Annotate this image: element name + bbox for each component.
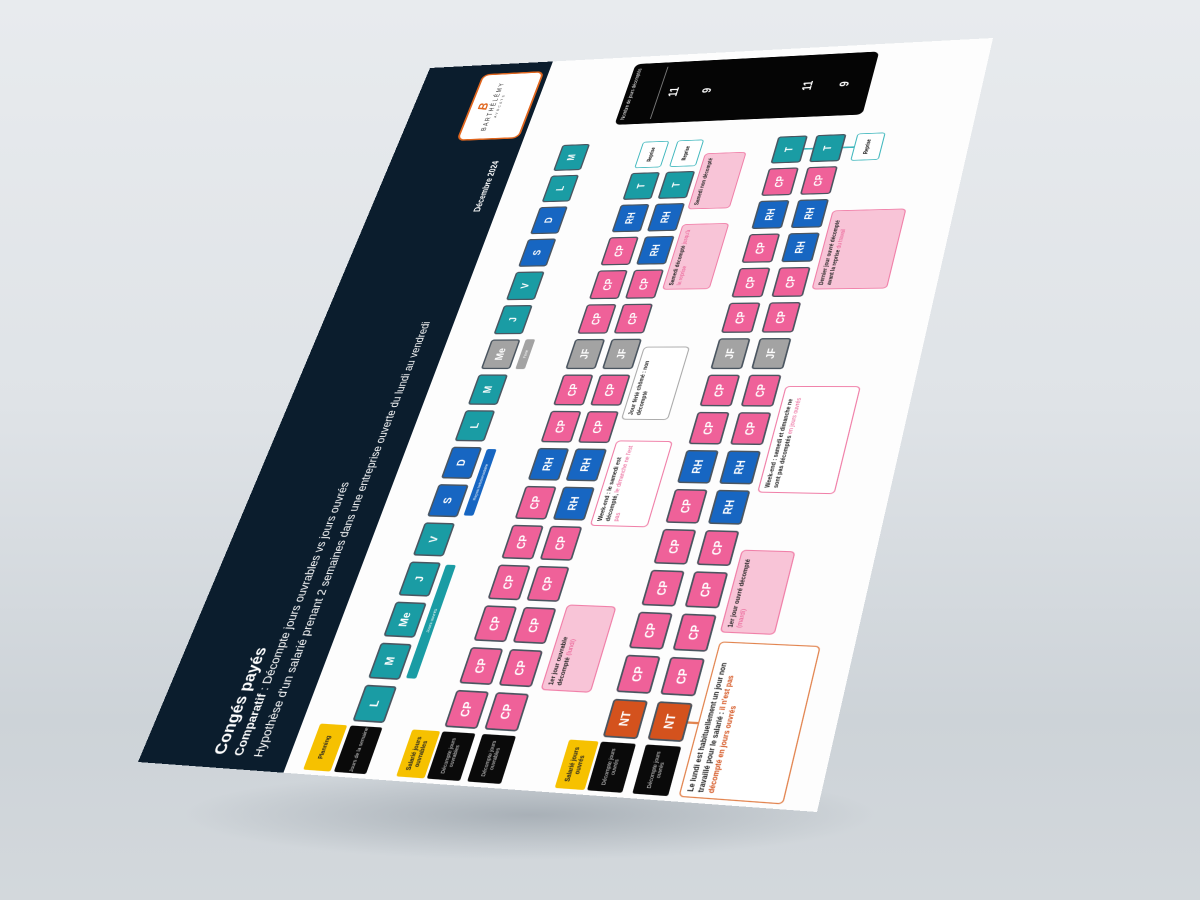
- row label C: [467, 734, 516, 784]
- callout: lundi non travaillé: [678, 641, 821, 805]
- row: planning days: V: [427, 536, 441, 543]
- row B: CP: [612, 245, 627, 257]
- callout: 1er jour ouvré: 1er jour ouvré décompté (mardi): [727, 559, 753, 628]
- row C: T: [670, 182, 683, 187]
- row E: CP: [783, 276, 799, 288]
- group label: ouvrables: Salarié jours ouvrables: [405, 737, 430, 771]
- row: planning days: S: [531, 250, 544, 255]
- row C: JF: [614, 349, 630, 359]
- row: planning days: Me: [396, 612, 414, 627]
- row B: CP: [514, 535, 531, 549]
- row D: CP: [666, 539, 684, 554]
- row E: CP: [709, 541, 727, 555]
- callout: samedi: Samedi décompté jusqu'à la reprise: [669, 230, 692, 285]
- row D: CP: [772, 176, 788, 187]
- tag: férié: Férié: [521, 350, 529, 358]
- callout: dimanche: [687, 152, 747, 209]
- row B: [444, 140, 669, 729]
- row: planning days: J: [413, 576, 427, 582]
- tag: repos hebdo: Repos hebdomadaire: [471, 464, 489, 500]
- callout: premier jour: 1er jour ouvrable décompté (lundi): [548, 637, 578, 686]
- row label C: Décompte jours ouvrables: [480, 741, 501, 777]
- row E: CP: [698, 582, 715, 597]
- tag: jours ouvrés: Jours ouvrés: [424, 609, 438, 633]
- row D: CP: [654, 581, 672, 596]
- row B: Reprise: [646, 147, 657, 162]
- row C: RH: [648, 244, 663, 256]
- row: planning days: M: [565, 154, 578, 161]
- row: planning days: L: [468, 423, 482, 429]
- row D: T: [783, 147, 796, 152]
- header band: [138, 61, 553, 773]
- row D: CP: [642, 623, 660, 638]
- total row E: 9: [836, 81, 853, 87]
- row E: JF: [764, 348, 779, 359]
- row label E: Décompte jours ouvrés: [645, 751, 665, 789]
- total row D: 11: [799, 80, 816, 91]
- row B: CP: [601, 279, 616, 291]
- row: planning days: V: [519, 283, 532, 289]
- callout: jour férié: Jour férié chômé : non décompté: [628, 361, 652, 415]
- row D: CP: [712, 384, 728, 397]
- row D: NT: [616, 711, 634, 727]
- row label B: Décompte jours ouvrables: [439, 738, 461, 774]
- row label: planning: Jours de la semaine: [347, 727, 369, 772]
- row B: JF: [578, 349, 593, 359]
- row C: CP: [637, 278, 652, 290]
- callout: lundi non travaillé: Le lundi est habituellement un jour non travaillé pour le salarié : il n'est pas décompté en jours ouvrés: [688, 663, 739, 794]
- row B: CP: [487, 616, 504, 631]
- row D: CP: [733, 311, 749, 324]
- tag: repos hebdo: [463, 449, 497, 516]
- row D: CP: [629, 666, 647, 682]
- row: planning days: Me: [493, 348, 509, 360]
- logo: BARTHÉLÉMY: [481, 82, 506, 131]
- reprise group 2: Reprise: [863, 139, 873, 154]
- row E: RH: [793, 241, 808, 254]
- row C: CP: [553, 536, 570, 550]
- connector: T to reprise: [843, 146, 854, 148]
- callout: samedi: [662, 223, 729, 290]
- callout: week-end ouvrés: [757, 386, 861, 494]
- logo: AVOCATS: [492, 94, 506, 118]
- group label: planning: [303, 724, 347, 772]
- connector: T to T: [804, 148, 813, 150]
- total row C: 9: [699, 88, 715, 93]
- row: planning days: M: [382, 656, 398, 666]
- row label D: Décompte jours ouvrés: [600, 748, 620, 785]
- paper sheet: [138, 38, 993, 812]
- paper shadow: [180, 770, 880, 860]
- row: planning days: M: [481, 386, 495, 393]
- row B: CP: [527, 496, 544, 510]
- row B: T: [635, 183, 648, 189]
- row: planning days: D: [455, 459, 469, 466]
- logo: [456, 71, 545, 141]
- row D: JF: [723, 348, 738, 359]
- row E: RH: [721, 500, 738, 515]
- callout: premier jour: [540, 604, 617, 693]
- row label E: [632, 744, 681, 796]
- row C: CP: [602, 384, 618, 396]
- row: planning days: L: [554, 186, 567, 191]
- subtitle: Comparatif : Décompte jours ouvrables vs jours ouvrés: [232, 482, 352, 756]
- row E: CP: [674, 668, 692, 685]
- row C: RH: [565, 496, 582, 511]
- row E: CP: [753, 384, 769, 397]
- row B: CP: [589, 313, 605, 325]
- row E: CP: [773, 311, 789, 324]
- group label: ouvrés: Salarié jours ouvrés: [564, 747, 587, 782]
- row E: NT: [661, 713, 679, 730]
- tag: jours ouvrés: [406, 565, 456, 679]
- row B: CP: [501, 575, 518, 590]
- row D: CP: [678, 499, 695, 513]
- totals label: Nombre de jours décomptés: [620, 68, 644, 120]
- callout: dernier jour: [811, 208, 907, 290]
- row D: [603, 136, 808, 740]
- row B: CP: [553, 420, 569, 433]
- callout: week-end ouvrés: Week-end : samedi et dimanche ne sont pas décomptés en jours ouvrés: [764, 398, 803, 488]
- row B: RH: [540, 457, 557, 471]
- row label: planning: [334, 725, 383, 774]
- row D: RH: [763, 208, 778, 221]
- row E: [648, 134, 846, 742]
- row C: Reprise: [681, 146, 692, 161]
- row: planning days: J: [507, 317, 520, 322]
- group label: ouvrables: [396, 729, 440, 778]
- row C: [484, 140, 704, 732]
- row D: CP: [701, 421, 717, 435]
- reprise group 2: [850, 132, 886, 161]
- callout: dimanche: Samedi non décompté: [694, 158, 715, 205]
- row C: RH: [578, 458, 595, 472]
- row C: CP: [626, 312, 641, 325]
- row D: RH: [690, 460, 706, 474]
- row: planning days: D: [542, 217, 556, 223]
- callout: week-end ouvrables: Week-end : le samedi est décompté, le dimanche ne l'est pas: [597, 446, 635, 522]
- callout: dernier jour: Dernier jour ouvré décompté avant la reprise du travail: [818, 220, 848, 285]
- row C: CP: [526, 618, 543, 633]
- row: planning days: [352, 144, 590, 724]
- row E: RH: [802, 207, 818, 220]
- row C: CP: [512, 660, 530, 676]
- hypothesis line: Hypothèse d'un salarié prenant 2 semaines dans une entreprise ouverte du lundi au vendredi: [252, 322, 433, 758]
- connector: NT to callout: [688, 721, 698, 724]
- row E: RH: [732, 460, 749, 475]
- callout: week-end ouvrables: [590, 440, 673, 527]
- totals bar: [614, 51, 879, 125]
- tag: férié: [515, 339, 535, 369]
- logo: B: [474, 103, 492, 111]
- row C: CP: [590, 420, 607, 434]
- row D: CP: [743, 276, 759, 289]
- row D: CP: [753, 242, 769, 254]
- row label D: [587, 742, 636, 793]
- callout: jour férié: [621, 347, 690, 420]
- row B: CP: [472, 658, 490, 674]
- callout: 1er jour ouvré: [720, 550, 796, 635]
- row C: RH: [658, 211, 674, 223]
- row E: CP: [811, 175, 826, 186]
- date: Décembre 2024: [472, 161, 501, 212]
- row B: RH: [623, 212, 638, 224]
- row B: CP: [565, 384, 581, 396]
- total row B: 11: [665, 87, 682, 97]
- row: planning days: S: [441, 497, 455, 504]
- row C: CP: [539, 576, 557, 591]
- row E: T: [821, 145, 834, 151]
- row: planning days: L: [367, 700, 382, 707]
- row B: CP: [458, 701, 476, 717]
- group label: planning: Planning: [318, 736, 333, 759]
- row label B: [427, 731, 476, 781]
- row E: CP: [686, 625, 704, 640]
- row C: CP: [498, 704, 516, 720]
- group label: ouvrés: [555, 740, 599, 790]
- row E: CP: [743, 422, 759, 435]
- title: Congés payés: [210, 647, 271, 755]
- totals label: [620, 67, 668, 120]
